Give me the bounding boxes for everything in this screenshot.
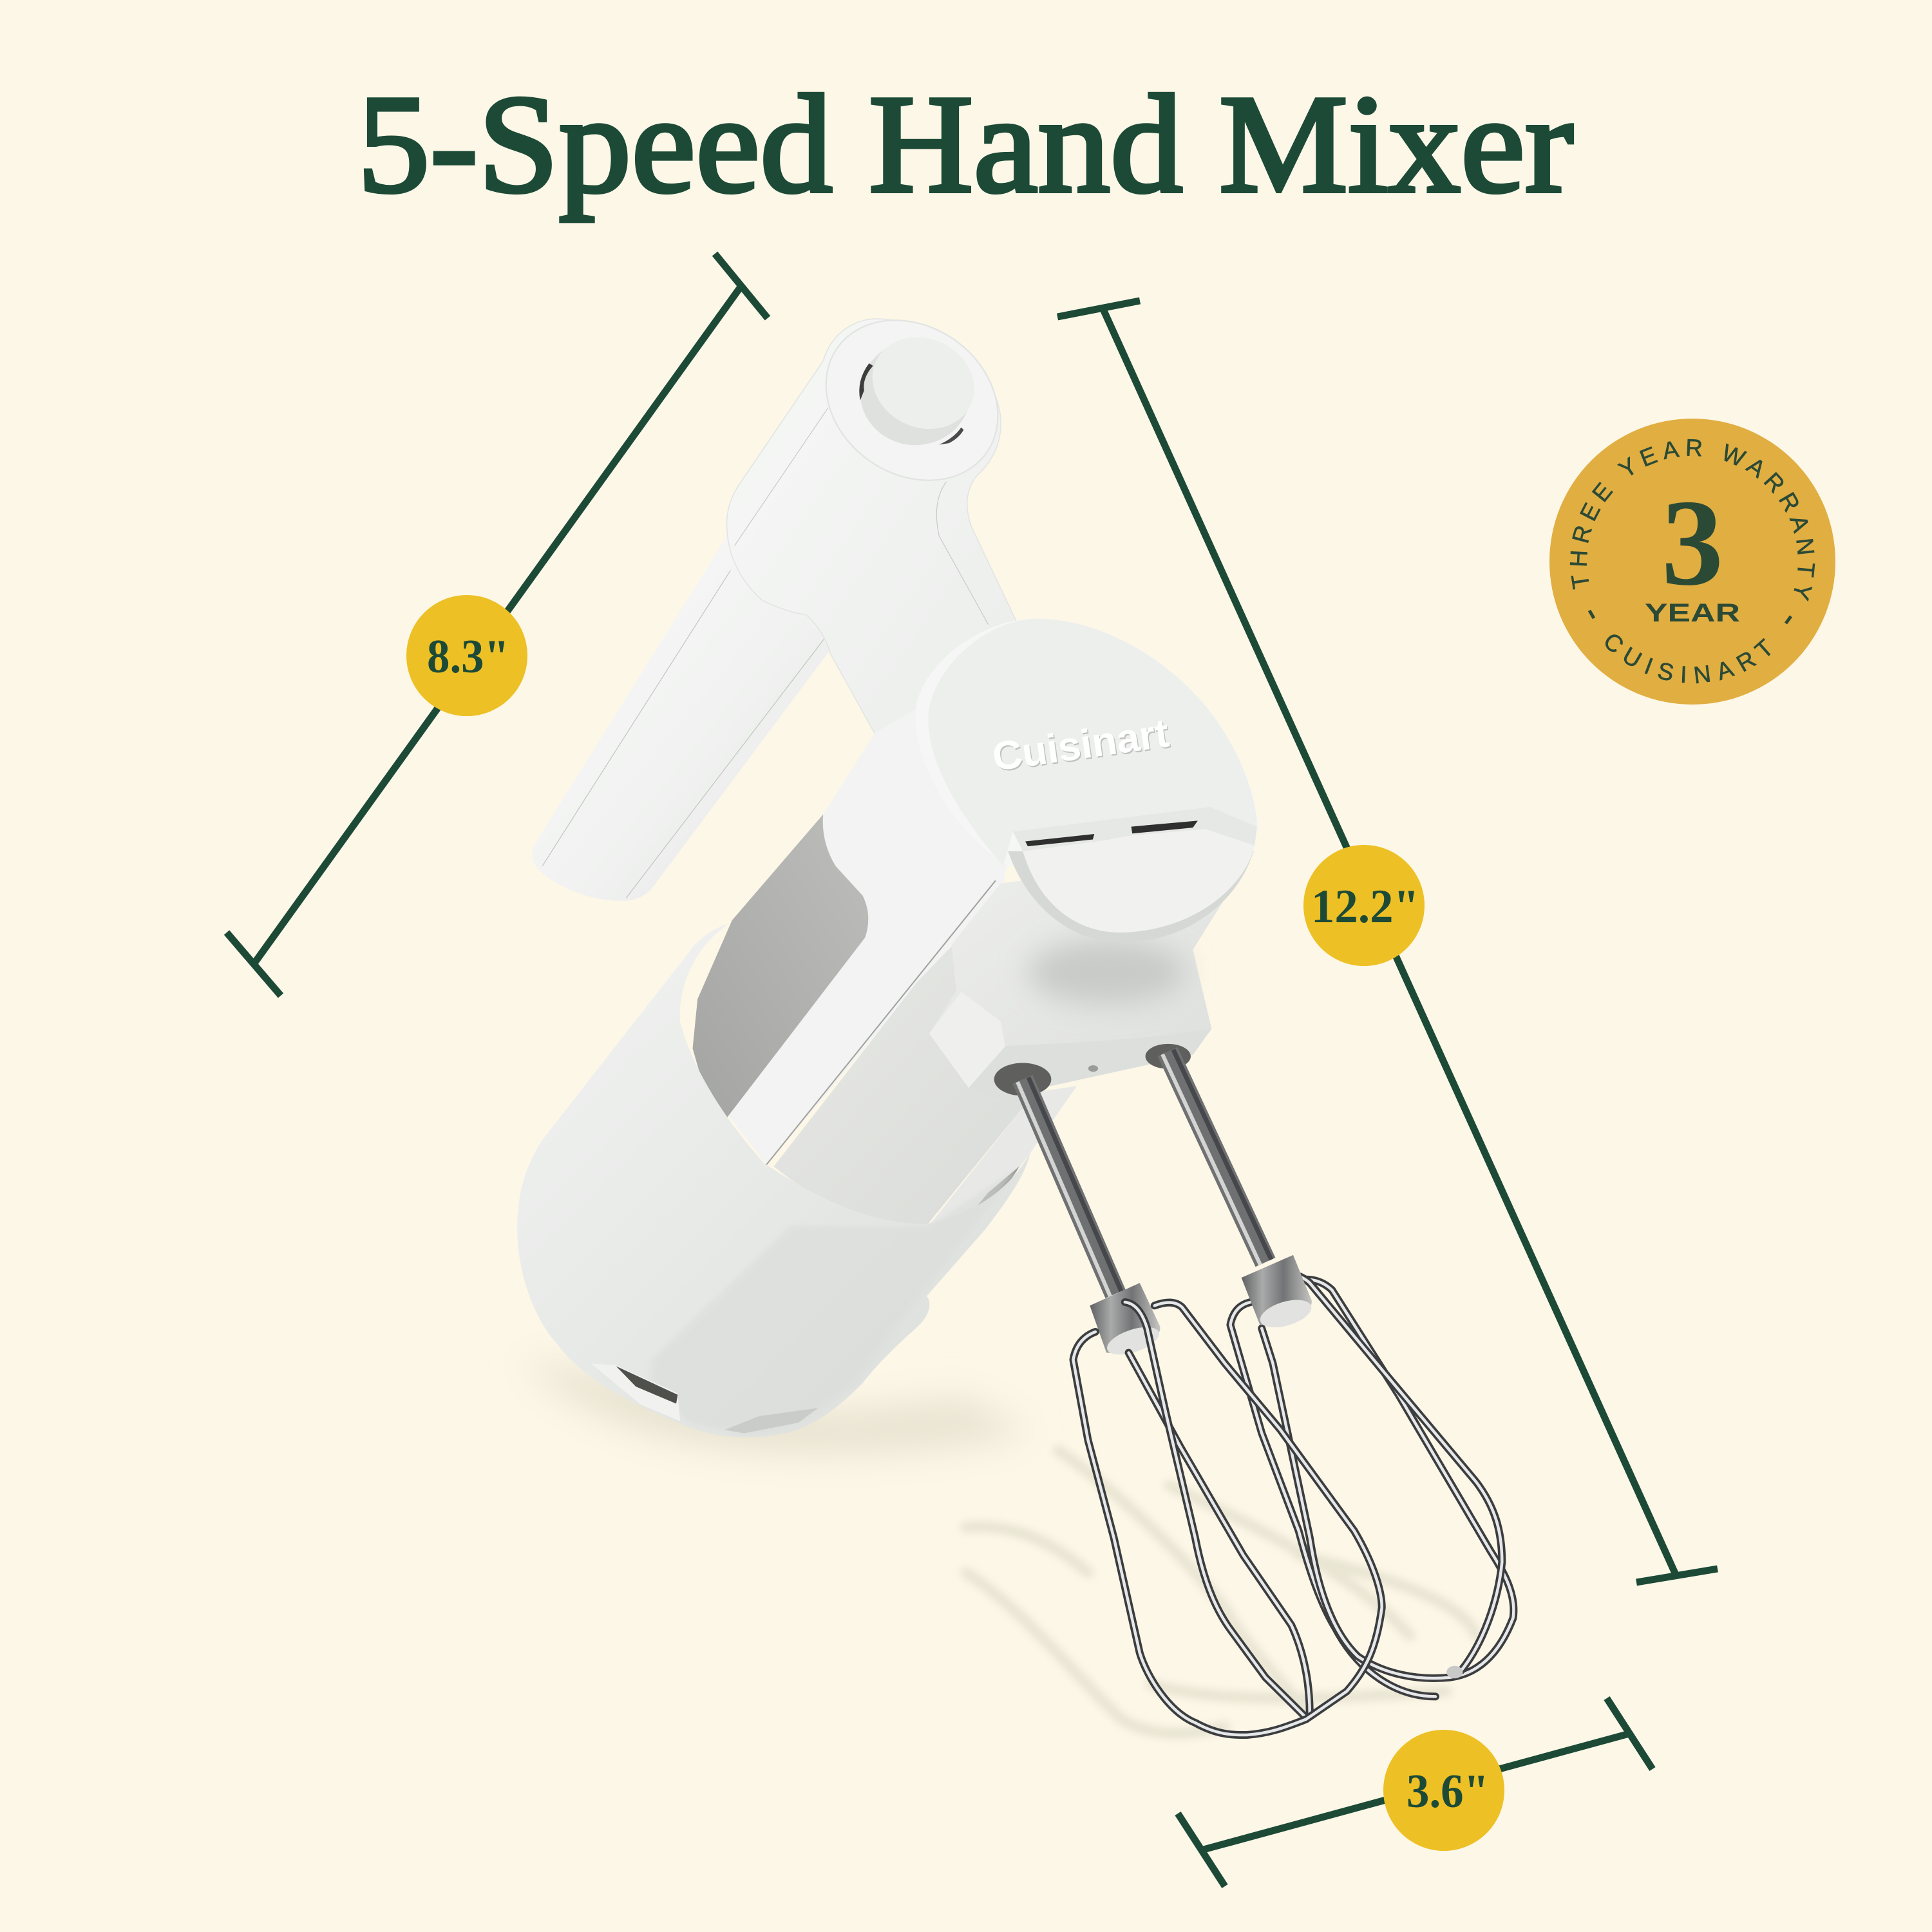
- vents: [591, 1363, 818, 1434]
- warranty badge: 3: [1662, 474, 1723, 611]
- warranty badge: YEAR: [1645, 599, 1740, 627]
- left whisk wires: [1073, 1302, 1382, 1735]
- dimension: depth 3.6 inches: [1178, 1698, 1653, 1886]
- neck: [727, 319, 1018, 743]
- cast shadows on the ground: [522, 1359, 1476, 1734]
- chassis strip: [724, 684, 1013, 1165]
- title: 5-Speed Hand Mixer: [357, 67, 1573, 222]
- Cuisinart logo: Cuisinart: [990, 710, 1171, 780]
- steel shafts: [1018, 1050, 1271, 1296]
- lower panel and right strip: [766, 880, 1077, 1226]
- grip handle: [532, 536, 831, 901]
- warranty badge: [1549, 419, 1835, 705]
- power button: [735, 287, 1029, 625]
- head block and beater collar: [915, 619, 1258, 1099]
- warranty badge: THREE YEAR WARRANTY: [1570, 439, 1815, 601]
- beater sockets: [994, 1044, 1191, 1096]
- motor cup: [517, 923, 1191, 1437]
- whisk beaters: [1073, 1255, 1513, 1735]
- hand mixer: [517, 287, 1513, 1735]
- warranty badge: CUISINART: [1605, 634, 1771, 684]
- head disk: [915, 619, 1258, 942]
- right whisk wires: [1230, 1273, 1513, 1696]
- dimension: depth 3.6 inches: 3.6": [1406, 1765, 1489, 1818]
- dimension: width 8.3 inches: 8.3": [427, 630, 509, 683]
- beater collars: [1090, 1255, 1315, 1360]
- gray window: [693, 814, 868, 1117]
- dimension: width 8.3 inches: [227, 254, 768, 996]
- dimension: height 12.2 inches: [1057, 301, 1718, 1582]
- dimension: height 12.2 inches: 12.2": [1311, 880, 1419, 933]
- mixer upper body: handle, button, chassis, head: [532, 287, 1029, 1165]
- Cuisinart logo: Cuisinart: [991, 712, 1173, 781]
